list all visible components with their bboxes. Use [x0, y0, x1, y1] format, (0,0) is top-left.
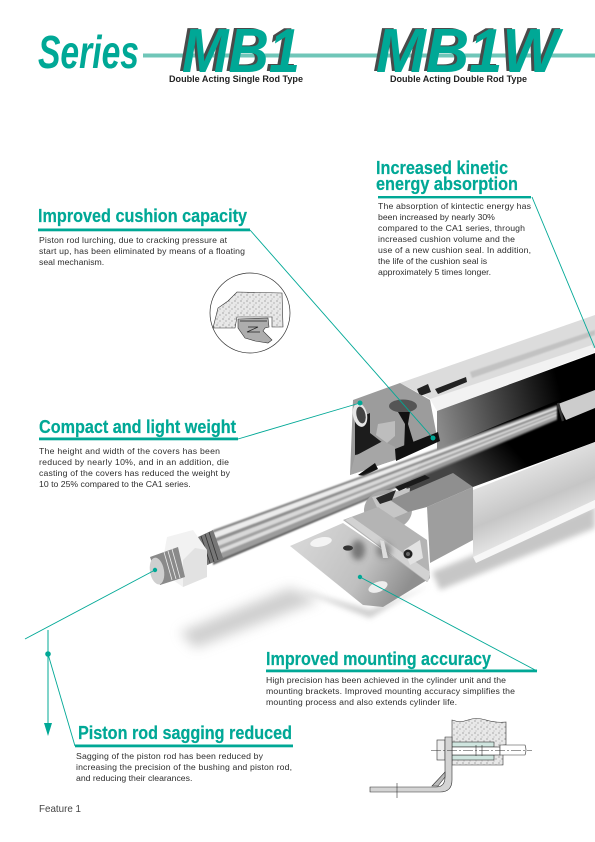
- bracket flange: [343, 507, 430, 582]
- arrow: rod sagging: [44, 630, 52, 736]
- piston rod: [213, 405, 557, 565]
- bracket bolt: [404, 540, 423, 565]
- threaded port: [389, 400, 417, 412]
- black port on tube: [435, 377, 467, 394]
- body text: use of a new cushion seal. In addition,: [378, 245, 531, 255]
- body text: [39, 235, 245, 267]
- body text: Sagging of the piston rod has been reduced by: [76, 751, 264, 761]
- lower tube: [473, 442, 595, 557]
- body text: casting of the covers has reduced the weight by: [39, 468, 231, 478]
- product photo: cylinder: [148, 315, 595, 648]
- bracket: [290, 507, 430, 607]
- body text: [378, 201, 532, 277]
- cover round port: [351, 402, 369, 428]
- product name MB1W: MB1W: [376, 17, 563, 86]
- body text: and reducing their clearances.: [76, 773, 192, 783]
- heading: Compact and light weight: [39, 417, 236, 437]
- panel: compact and light weight: [39, 417, 238, 489]
- body text: seal mechanism.: [39, 257, 104, 267]
- rear slot: [395, 432, 440, 461]
- panel: improved mounting accuracy: [266, 649, 537, 707]
- panel: piston rod sagging reduced: [75, 723, 293, 783]
- ground shadows: [180, 588, 320, 648]
- product name MB1: MB1: [179, 16, 297, 85]
- icon: mounting section drawing: [370, 718, 532, 798]
- cavity back wall: [437, 353, 595, 450]
- seal wheel: [364, 490, 412, 530]
- body text: [39, 446, 231, 489]
- cover grey pocket: [376, 421, 395, 443]
- body text: mounting brackets. Improved mounting accuracy simplifies the: [266, 686, 515, 696]
- body text: approximately 5 times longer.: [378, 267, 491, 277]
- body text: increasing the precision of the bushing and piston rod,: [76, 762, 292, 772]
- body text: compared to the CA1 series, through: [378, 223, 525, 233]
- icon: cushion seal detail: [210, 273, 290, 353]
- lower cover top: [390, 473, 473, 512]
- body text: been increased by nearly 30%: [378, 212, 495, 222]
- series label: Series: [38, 26, 139, 78]
- body text: reduced by nearly 10%, and in an addition, die: [39, 457, 229, 467]
- body text: The height and width of the covers has been: [39, 446, 220, 456]
- body text: mounting process and also extends cylinder life.: [266, 697, 457, 707]
- heading: energy absorption: [376, 174, 518, 194]
- body text: start up, has been eliminated by means of a floating: [39, 246, 245, 256]
- subtitle MB1W: Double Acting Double Rod Type: [390, 74, 527, 84]
- product name MB1: MB1: [182, 17, 300, 86]
- callout dot: rod tip: [153, 568, 157, 572]
- body text: 10 to 25% compared to the CA1 series.: [39, 479, 191, 489]
- body text: [266, 675, 515, 707]
- body text: [76, 751, 292, 783]
- heading: [376, 158, 518, 194]
- cavity lower black: [400, 385, 595, 500]
- body text: Piston rod lurching, due to cracking pressure at: [39, 235, 228, 245]
- piston inner end: [558, 390, 595, 420]
- panel: improved cushion capacity: [38, 206, 250, 267]
- cover bottom: [350, 441, 395, 475]
- heading: Improved cushion capacity: [38, 206, 247, 226]
- heading: Improved mounting accuracy: [266, 649, 491, 669]
- body text: increased cushion volume and the: [378, 234, 515, 244]
- product name MB1W: MB1W: [373, 16, 560, 85]
- body text: High precision has been achieved in the cylinder unit and the: [266, 675, 506, 685]
- footer: Feature 1: [39, 803, 81, 815]
- leader lines: [25, 197, 595, 746]
- subtitle MB1: Double Acting Single Rod Type: [169, 74, 303, 84]
- heading: Piston rod sagging reduced: [78, 723, 292, 743]
- heading: Increased kinetic: [376, 158, 508, 178]
- panel: increased kinetic energy absorption: [376, 158, 532, 277]
- rod thread, nut and tip: [148, 530, 223, 587]
- header band: [38, 16, 595, 86]
- callout dot: bracket: [358, 575, 362, 579]
- lower cover side: [427, 487, 473, 563]
- body text: the life of the cushion seal is: [378, 256, 488, 266]
- callout dot: cover: [358, 400, 362, 406]
- body text: The absorption of kintectic energy has: [378, 201, 532, 211]
- callout dot: cushion: [430, 436, 436, 440]
- bracket plate: [290, 523, 427, 607]
- upper tube top face: [400, 315, 595, 400]
- front cover: [350, 383, 437, 475]
- cover left cutout: [355, 413, 383, 455]
